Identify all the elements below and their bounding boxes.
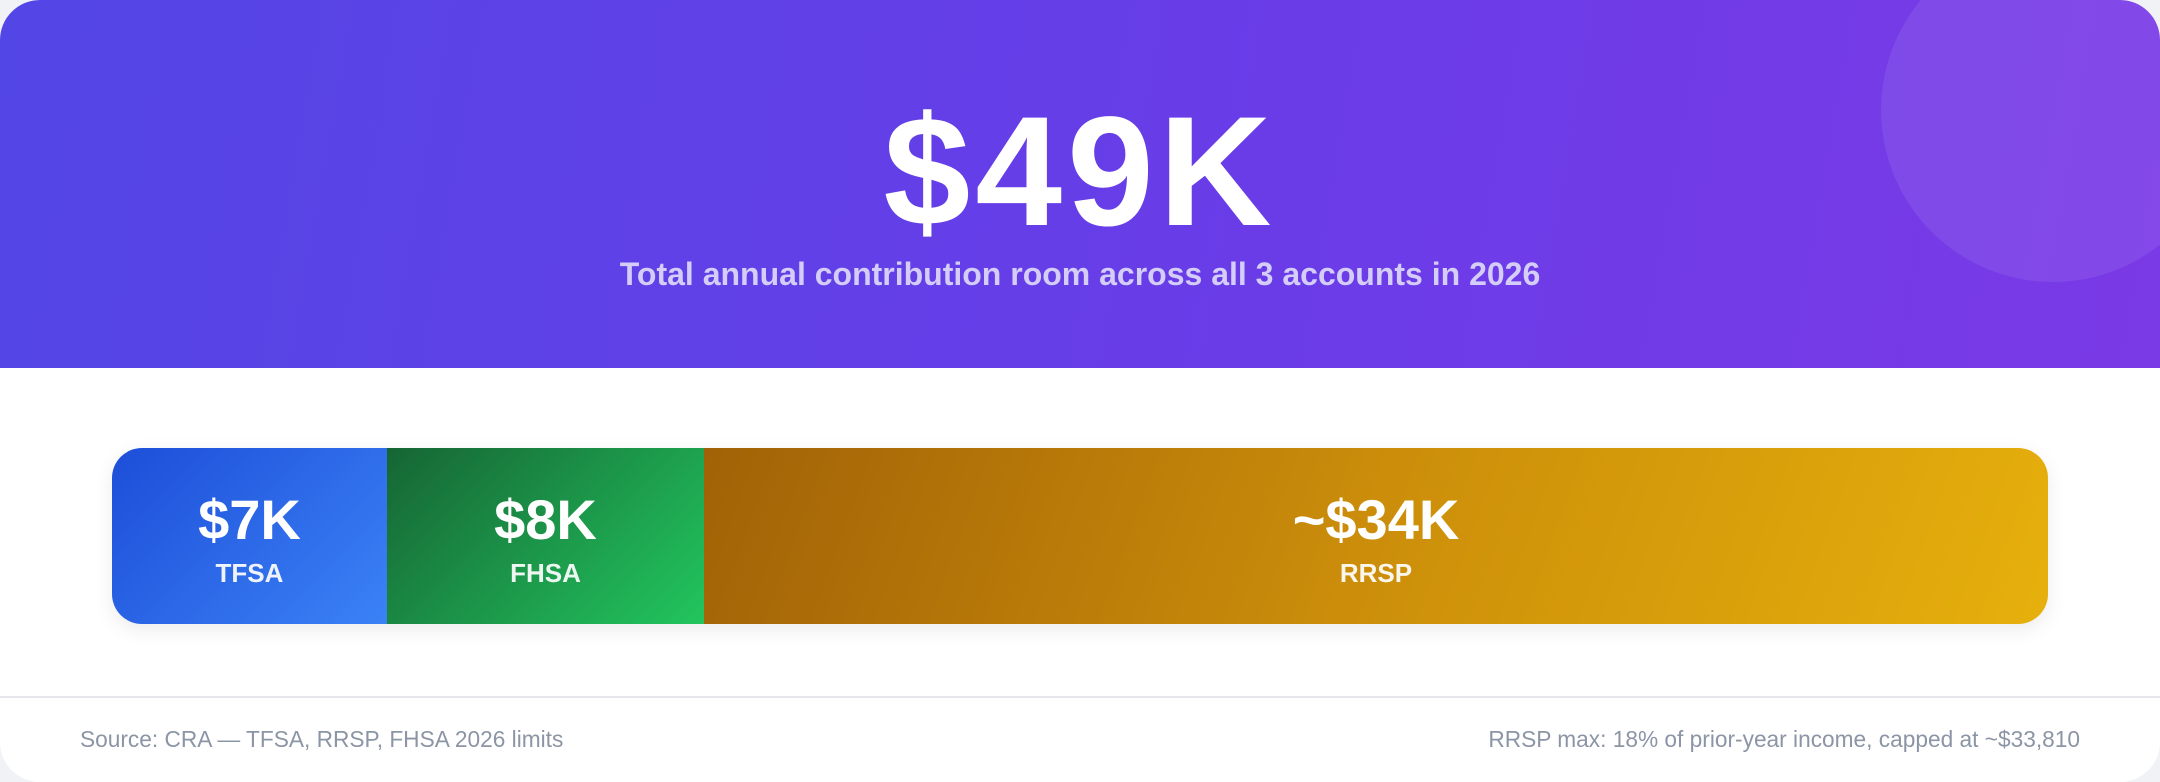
segment: TFSA	[112, 448, 387, 624]
segment: FHSA	[387, 448, 704, 624]
decorative circle	[1881, 0, 2160, 282]
footer note: RRSP max: 18% of prior-year income, capped at ~$33,810	[1488, 726, 2080, 752]
subtitle: Total annual contribution room across all 3 accounts in 2026	[620, 256, 1540, 292]
stacked bar	[112, 448, 2048, 624]
segment: TFSA: $7K	[198, 488, 301, 551]
segment: RRSP	[704, 448, 2048, 624]
segment: RRSP: RRSP	[1340, 558, 1412, 588]
segment: TFSA: TFSA	[216, 558, 283, 588]
segment: FHSA: FHSA	[510, 558, 581, 588]
segment: FHSA: $8K	[494, 488, 597, 551]
header panel	[0, 0, 2160, 368]
segment: RRSP: ~$34K	[1293, 488, 1459, 551]
headline number: $49K	[884, 85, 1276, 259]
footer source: Source: CRA — TFSA, RRSP, FHSA 2026 limits	[80, 726, 563, 752]
